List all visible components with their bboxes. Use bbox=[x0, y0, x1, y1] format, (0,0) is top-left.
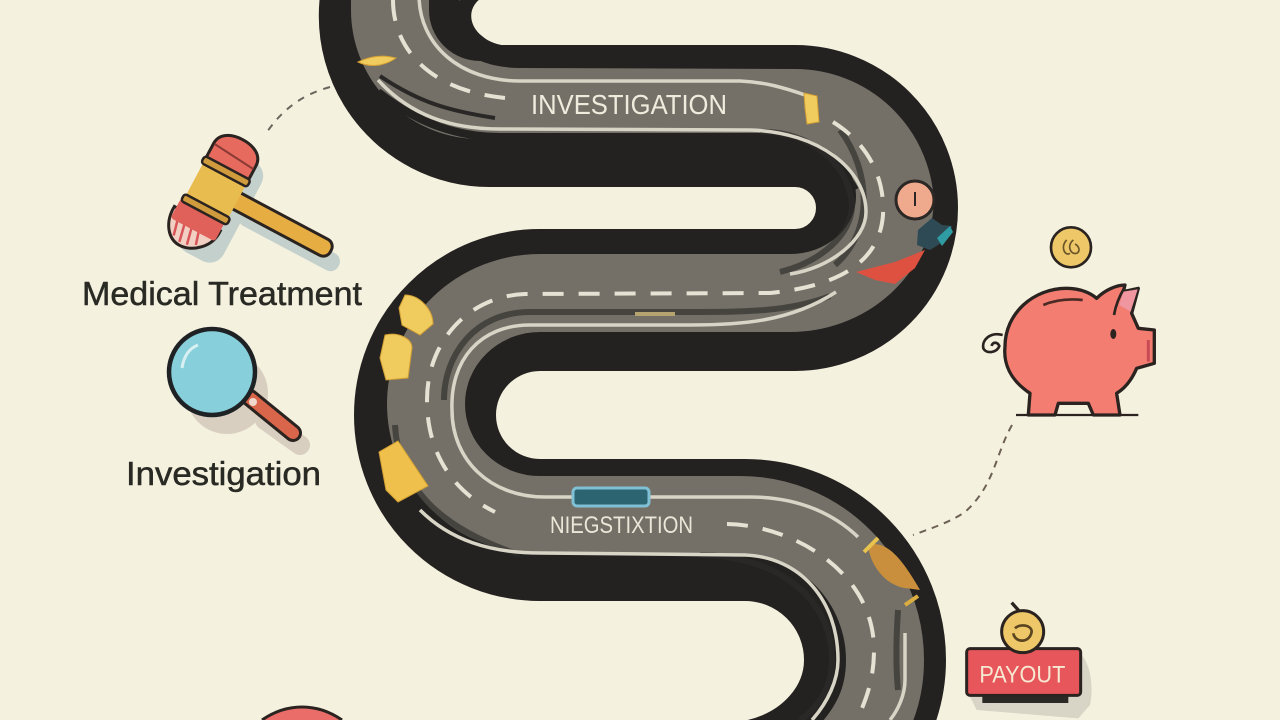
gavel handle bbox=[221, 187, 335, 259]
winding road bbox=[378, 0, 938, 720]
gavel top red bbox=[206, 128, 264, 180]
label: medical treatment: Medical Treatment bbox=[82, 275, 362, 312]
pig ground line bbox=[1016, 411, 1138, 418]
road markers: yellow blocks bbox=[358, 56, 819, 502]
road dark streak bbox=[380, 76, 495, 118]
icon: payout sign with coin bbox=[967, 603, 1092, 718]
road sign: blue marker bbox=[573, 488, 649, 506]
road label: investigation: INVESTIGATION bbox=[531, 89, 727, 120]
road marker: orange block bbox=[864, 538, 920, 605]
coin bbox=[1051, 227, 1091, 267]
road marker: peach circle bbox=[896, 181, 934, 219]
connector: dashed line to piggy bank bbox=[913, 425, 1012, 535]
road outer black band bbox=[390, 0, 887, 720]
gavel collars bbox=[201, 156, 251, 187]
gavel yellow body bbox=[184, 161, 247, 222]
sign base bbox=[982, 695, 1068, 703]
connector: dashed line to gavel bbox=[265, 87, 330, 135]
road label: negotiation: NIEGSTIXTION bbox=[550, 512, 693, 539]
road inner cusp fill bbox=[450, 0, 515, 70]
road marker: teal and red shapes bbox=[856, 218, 953, 284]
road grey surface bbox=[390, 0, 895, 720]
sign stem bbox=[1012, 603, 1021, 613]
sign coin bbox=[1002, 611, 1044, 653]
lower lane lines bbox=[378, 80, 905, 720]
icon: piggy bank with coin bbox=[983, 227, 1154, 415]
pig tail bbox=[983, 334, 1003, 352]
sign shadow bbox=[970, 655, 1092, 718]
pig ear bbox=[1119, 289, 1138, 312]
label: investigation: Investigation bbox=[126, 455, 321, 492]
upper lane line bbox=[419, 0, 805, 95]
magnifier handle bbox=[250, 398, 293, 433]
magnifier lens bbox=[169, 329, 255, 415]
pig eye and slot bbox=[1110, 329, 1116, 339]
gavel shadow bbox=[172, 146, 363, 319]
gavel lower red bbox=[171, 199, 225, 241]
icon: magnifying glass bbox=[169, 329, 300, 445]
road edge trim bbox=[378, 0, 938, 208]
magnifier shadow bbox=[186, 352, 268, 434]
icon: partial pink dome at bottom bbox=[262, 707, 342, 720]
road inner shading bbox=[395, 130, 898, 720]
pig body bbox=[1005, 285, 1154, 415]
sign text: PAYOUT bbox=[979, 662, 1066, 689]
centre dashed line bbox=[393, 0, 883, 720]
icon: gavel bbox=[158, 126, 370, 319]
gavel hatched head end bbox=[159, 206, 220, 259]
sign board bbox=[967, 649, 1081, 695]
